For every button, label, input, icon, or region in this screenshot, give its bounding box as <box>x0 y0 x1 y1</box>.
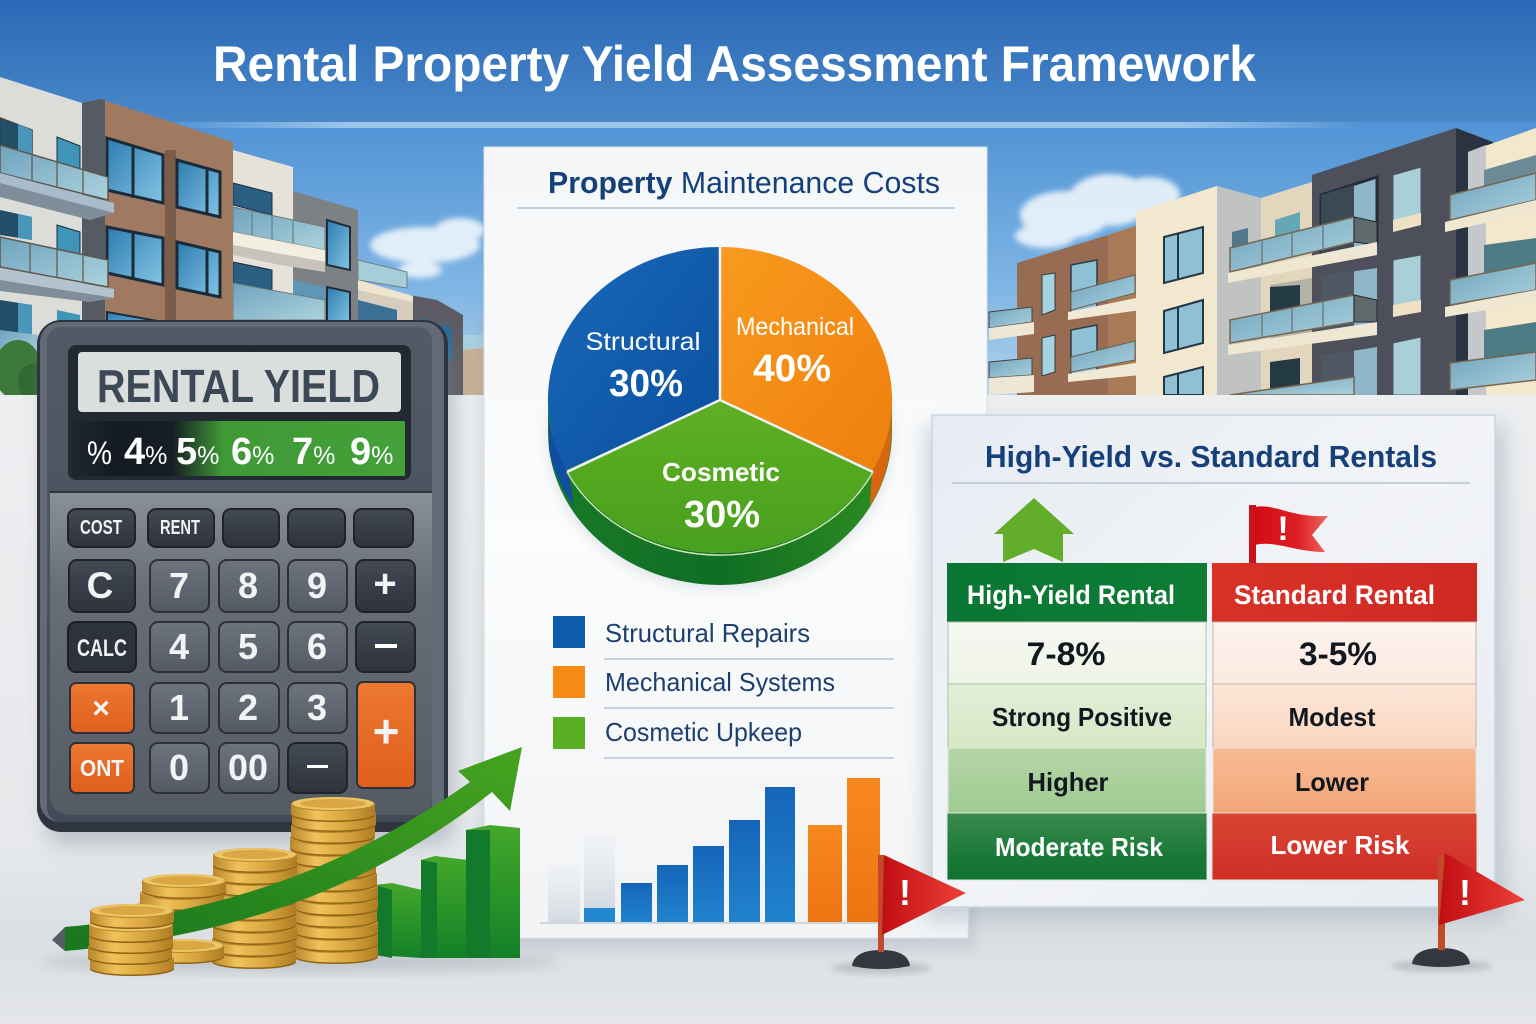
panel: property maintenance costs <box>480 147 987 950</box>
coin stack: tall back <box>290 797 378 964</box>
yield percentage strip: % <box>87 435 112 471</box>
calculator keys: + <box>373 562 397 606</box>
yield percentage strip: 5% <box>176 431 219 473</box>
calculator keys: 1 <box>169 687 189 728</box>
green growth arrow <box>52 747 522 951</box>
calculator keys: + <box>373 705 399 757</box>
title: Rental Property Yield Assessment Framework <box>213 36 1256 92</box>
yield percentage strip: 9% <box>350 431 393 473</box>
green growth bars <box>40 825 560 972</box>
column: high-yield rental: 7-8% <box>1026 636 1106 672</box>
coin stack: small back <box>135 874 226 964</box>
coin stack: middle <box>212 848 297 969</box>
calculator keys: 8 <box>238 565 258 606</box>
calculator keys: 2 <box>238 687 258 728</box>
calculator keys: 3 <box>307 687 327 728</box>
panel: high-yield vs standard rentals <box>925 415 1505 920</box>
column: standard rental: 3-5% <box>1299 636 1377 672</box>
label: structural: 30% <box>609 363 683 405</box>
legend <box>553 616 894 758</box>
pie chart <box>548 247 892 590</box>
calculator keys: × <box>92 692 110 725</box>
calculator keys: 4 <box>169 626 189 667</box>
calculator keys: 6 <box>307 626 327 667</box>
lower wall background <box>0 395 1536 1024</box>
calculator keys: 5 <box>238 626 258 667</box>
label: structural <box>586 328 700 405</box>
column: standard rental: Modest <box>1288 702 1376 732</box>
calculator keys: COST <box>80 517 122 539</box>
legend: Cosmetic Upkeep <box>605 717 802 747</box>
column: standard rental: Lower <box>1295 767 1369 797</box>
calculator keys <box>68 509 415 793</box>
panel heading: Property Maintenance Costs <box>548 165 940 200</box>
calculator keys: 0 <box>169 747 189 788</box>
calculator <box>37 320 455 845</box>
right apartment buildings <box>989 128 1536 395</box>
calculator keys: C <box>87 565 113 606</box>
bar chart <box>540 778 885 923</box>
column: high-yield rental: Moderate Risk <box>995 832 1163 862</box>
legend: Structural Repairs <box>605 618 810 648</box>
calculator keys: 9 <box>307 565 327 606</box>
column: high-yield rental <box>947 563 1207 880</box>
column: standard rental: Standard Rental <box>1234 580 1435 610</box>
red flag: right: ! <box>1459 872 1471 913</box>
label: cosmetic <box>662 457 780 536</box>
icon: red warning flag: ! <box>1277 510 1289 548</box>
icon: red warning flag <box>1249 505 1328 563</box>
calculator keys: 00 <box>228 747 268 788</box>
calculator keys: 7 <box>169 565 189 606</box>
red flag: right <box>1391 853 1525 972</box>
column: high-yield rental: Strong Positive <box>992 702 1172 732</box>
icon: green house arrow <box>994 498 1074 562</box>
column: high-yield rental: High-Yield Rental <box>967 580 1175 610</box>
label: structural: Structural <box>586 328 700 356</box>
yield percentage strip: 6% <box>231 431 274 473</box>
background sky <box>0 120 1536 400</box>
column: standard rental: Lower Risk <box>1270 830 1410 860</box>
red flag: center <box>831 855 966 974</box>
label: mechanical: 40% <box>753 348 831 390</box>
clouds <box>370 174 1180 278</box>
column: standard rental <box>1212 563 1477 880</box>
coin stack: front <box>88 904 174 976</box>
calculator keys: RENT <box>160 517 200 539</box>
yield percentage strip <box>72 421 405 476</box>
calculator keys: ONT <box>80 755 124 781</box>
label: cosmetic: Cosmetic <box>662 457 780 487</box>
yield percentage strip: 7% <box>292 431 335 473</box>
header band <box>0 0 1536 122</box>
panel heading: High-Yield vs. Standard Rentals <box>985 439 1437 474</box>
calculator keys: CALC <box>77 635 127 662</box>
yield percentage strip: 4% <box>124 431 167 473</box>
red flag: center: ! <box>899 872 911 913</box>
label: mechanical <box>736 313 854 390</box>
legend: Mechanical Systems <box>605 667 835 697</box>
display: rental yield: RENTAL YIELD <box>97 360 380 412</box>
column: high-yield rental: Higher <box>1028 767 1108 797</box>
label: mechanical: Mechanical <box>736 313 854 341</box>
left apartment buildings <box>0 77 484 400</box>
label: cosmetic: 30% <box>684 494 760 536</box>
